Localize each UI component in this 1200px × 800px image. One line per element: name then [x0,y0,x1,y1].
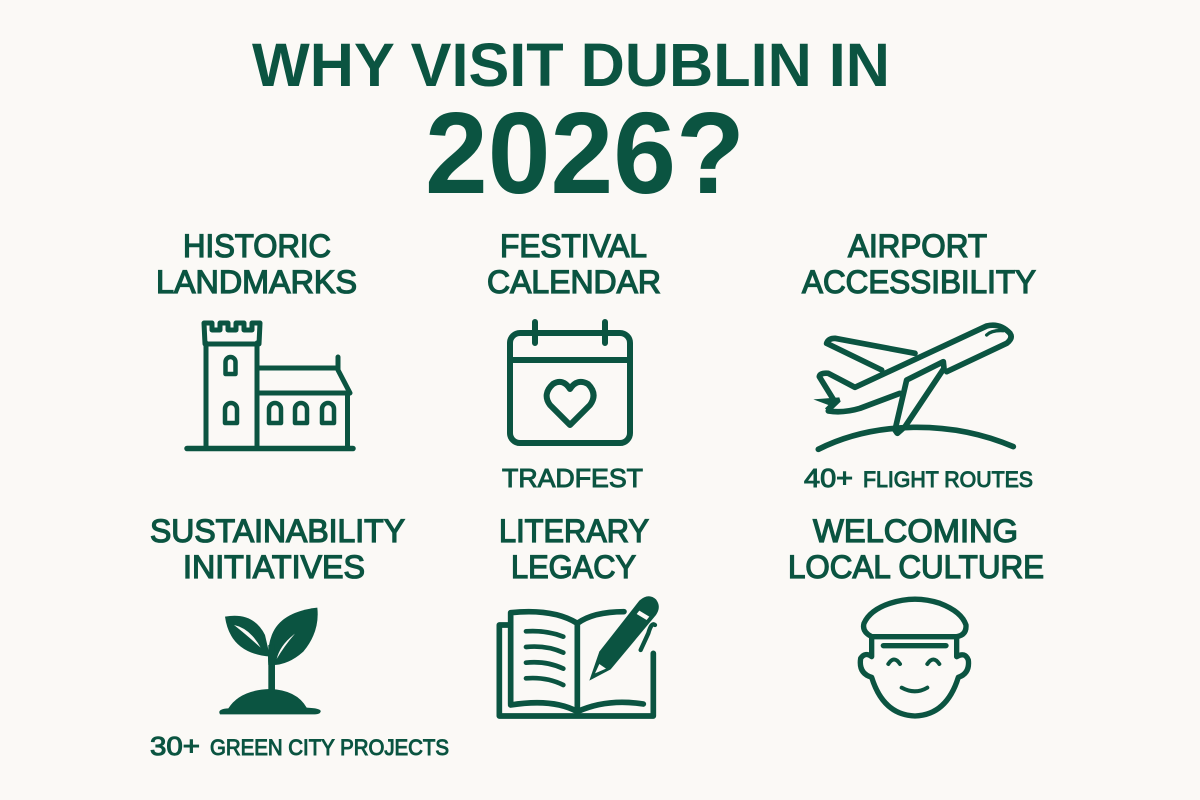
icon: calendar with heart [510,322,630,443]
title: 2026? [425,88,745,218]
label: tradfest: TRADFEST [502,463,643,493]
heading: welcoming local culture [788,513,1044,585]
icon: castle church [187,323,353,448]
panel: sustainability initiatives [150,513,449,761]
heading: historic landmarks [156,228,357,300]
heading: airport accessibility [802,228,1036,300]
icon: open book and pen [499,596,659,716]
icon: face with flat cap [860,599,969,716]
heading: airport accessibility: ACCESSIBILITY [802,264,1036,300]
panel: festival calendar [487,228,661,493]
heading: sustainability initiatives [150,513,405,585]
heading: airport accessibility: AIRPORT [848,228,987,264]
heading: festival calendar: FESTIVAL [500,228,647,264]
panel: historic landmarks [156,228,357,448]
label: flight routes: 40+ [804,463,853,493]
heading: welcoming local culture: WELCOMING [813,513,1018,549]
title [252,31,890,218]
heading: sustainability initiatives: SUSTAINABILITY [150,513,405,549]
label: flight routes [804,463,1033,493]
heading: literary legacy: LITERARY [499,513,649,549]
title: WHY VISIT DUBLIN IN [252,31,890,99]
heading: literary legacy [499,513,649,585]
heading: welcoming local culture: LOCAL CULTURE [788,549,1044,585]
icon: airplane taking off [813,325,1013,449]
heading: festival calendar [487,228,661,300]
heading: historic landmarks: LANDMARKS [156,264,357,300]
label: green city projects: GREEN CITY PROJECTS [210,735,449,760]
panel: airport accessibility [802,228,1036,493]
heading: literary legacy: LEGACY [511,549,636,585]
label: green city projects: 30+ [150,731,200,761]
label: flight routes: FLIGHT ROUTES [863,467,1033,492]
heading: historic landmarks: HISTORIC [183,228,331,264]
icon: seedling [219,608,321,714]
panel: literary legacy [499,513,659,716]
label: green city projects [150,731,449,761]
heading: festival calendar: CALENDAR [487,264,661,300]
panel: welcoming local culture [788,513,1044,716]
heading: sustainability initiatives: INITIATIVES [183,549,365,585]
